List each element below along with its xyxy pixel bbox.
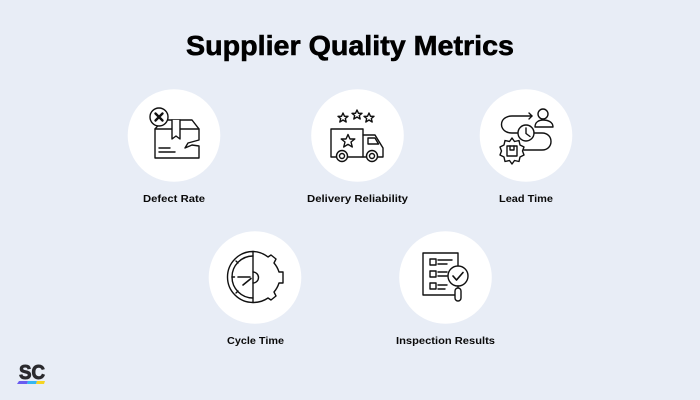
title: Supplier Quality Metrics: [186, 30, 514, 61]
metric: Inspection Results: [396, 231, 495, 347]
logo: SC: [17, 361, 45, 384]
icon: damaged box with X badge: [150, 108, 199, 158]
icon circle: Defect Rate: [128, 89, 220, 182]
icon: half clock half gear: [228, 252, 283, 303]
icon circle: Inspection Results: [399, 231, 492, 324]
icon circle: Delivery Reliability: [311, 89, 404, 182]
icon circle: Cycle Time: [209, 231, 301, 324]
metric: Cycle Time: [209, 231, 301, 347]
label: Defect Rate: Defect Rate: [143, 193, 205, 205]
label: Delivery Reliability: Delivery Reliability: [307, 193, 408, 205]
icon: process path with clock, gear and person: [500, 109, 553, 164]
label: Lead Time: Lead Time: [499, 193, 553, 205]
logo letters: SC: [19, 361, 45, 384]
label: Inspection Results: Inspection Results: [396, 335, 495, 347]
icon circle: Lead Time: [480, 89, 572, 182]
icon: checklist with magnifier: [423, 253, 468, 301]
icon: delivery truck with stars: [331, 110, 383, 162]
label: Cycle Time: Cycle Time: [227, 335, 284, 347]
logo colour bar: [17, 381, 45, 384]
metric: Defect Rate: [128, 89, 220, 205]
metric: Lead Time: [480, 89, 572, 205]
metric: Delivery Reliability: [307, 89, 408, 205]
